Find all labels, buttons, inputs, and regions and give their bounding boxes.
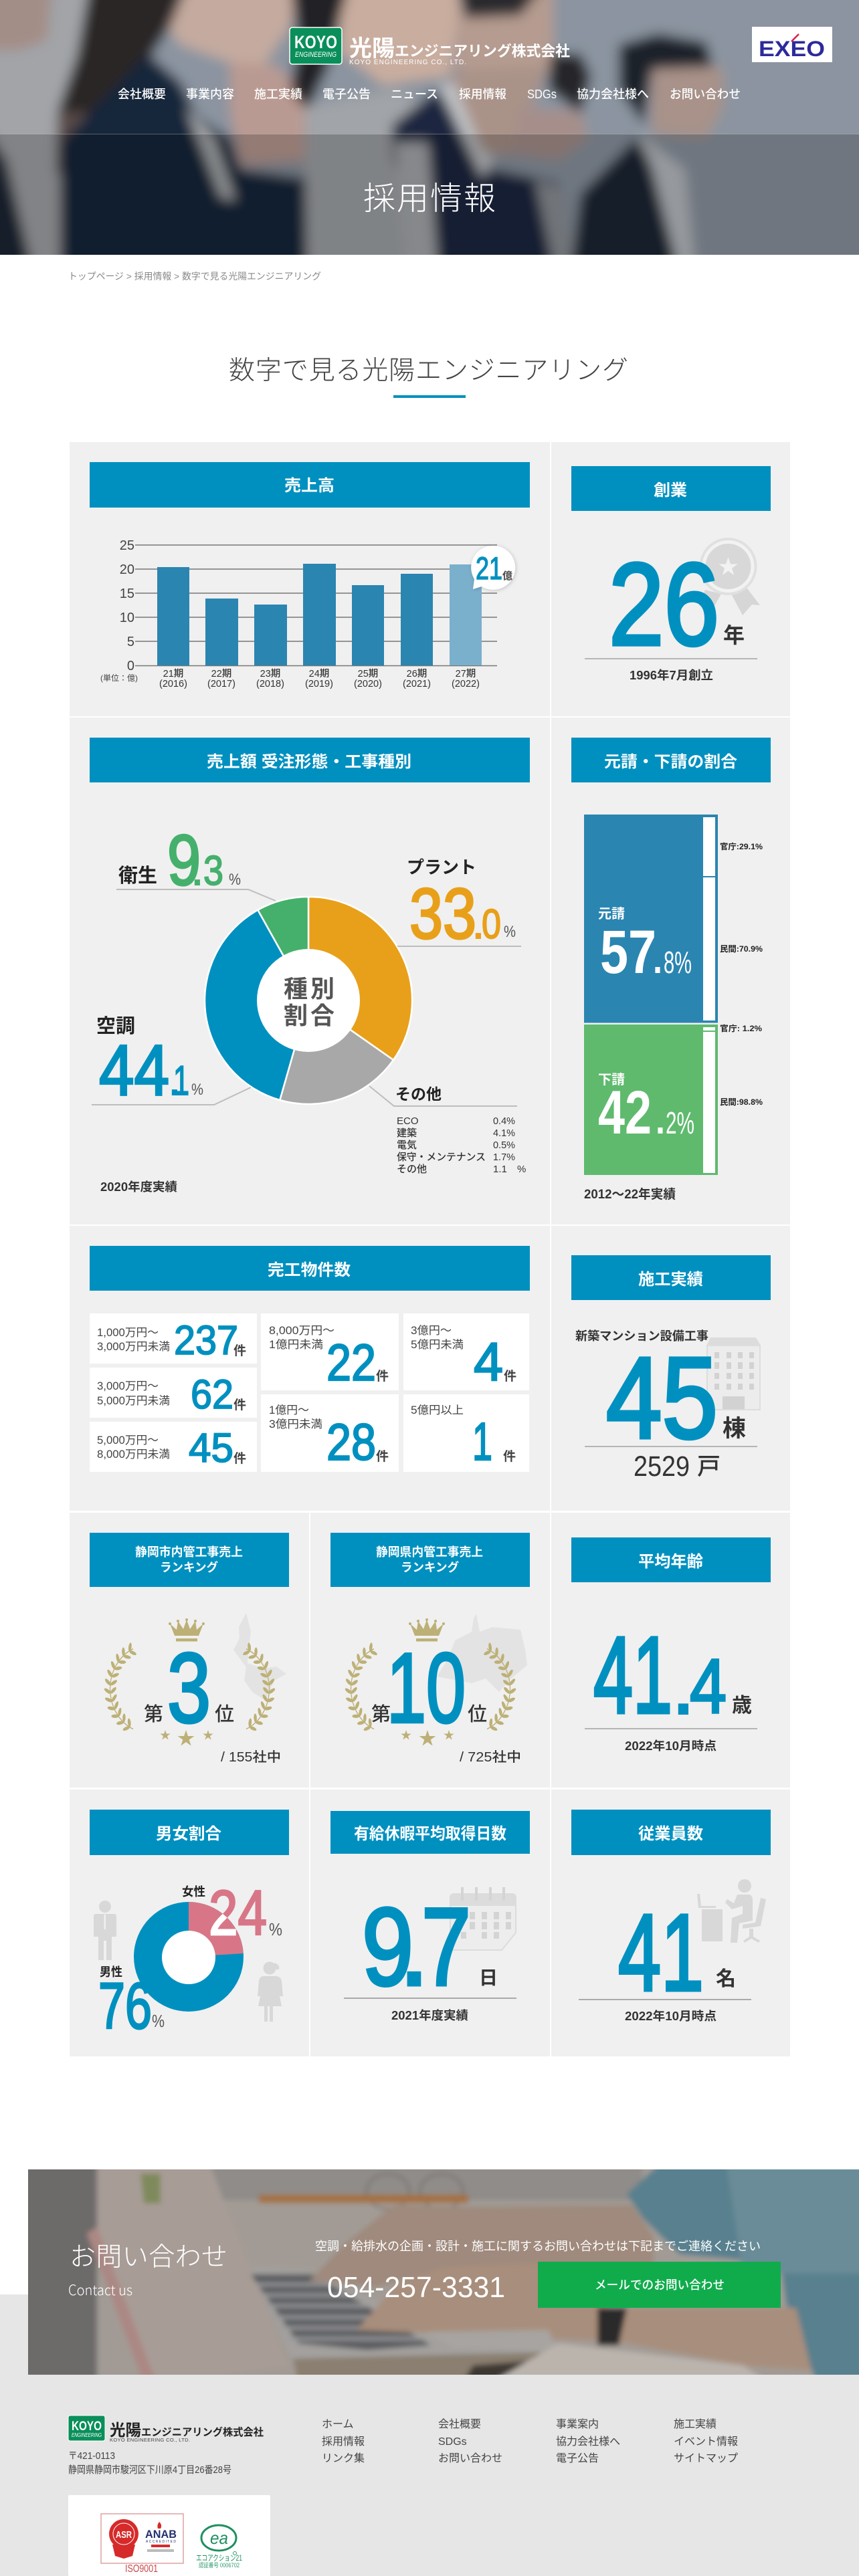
- panel: prefecture ranking: [310, 1513, 550, 1788]
- label: sanitary 9.3%: 3: [203, 848, 223, 894]
- label: air conditioning 44.1%: 空調: [96, 1015, 135, 1037]
- cell: 80M-100M: [261, 1313, 399, 1392]
- bar chart: sales: 0: [127, 659, 134, 673]
- cell: over 500M: [403, 1394, 529, 1472]
- label: other breakdown: 保守・メンテナンス: [397, 1152, 486, 1163]
- panel: employees: 2022年10月時点: [625, 2009, 717, 2023]
- footer background: [0, 2294, 859, 2576]
- badge: ANAB: [145, 2522, 177, 2552]
- panel: construction record: 新築マンション設備工事: [575, 1329, 708, 1343]
- navigation: 協力会社様へ: [577, 88, 649, 101]
- footer links: リンク集: [322, 2452, 365, 2464]
- bar chart: sales: 25: [120, 538, 134, 553]
- callout: 21 oku: 21: [476, 550, 502, 586]
- label: sanitary 9.3%: 衛生: [118, 865, 157, 887]
- value 9.7: 9: [362, 1885, 413, 2008]
- panel: average age: 歳: [732, 1695, 752, 1717]
- panel: average age: 平均年齢: [638, 1553, 703, 1571]
- bar chart: sales: [100, 538, 497, 689]
- panel: construction record: 棟: [723, 1416, 746, 1442]
- rank value: [144, 1633, 234, 1743]
- donut centre label: 割合: [284, 1002, 335, 1029]
- label: air conditioning 44.1%: 1: [173, 1058, 189, 1104]
- panel: paid leave: 2021年度実績: [391, 2008, 468, 2022]
- panel: sales: [70, 442, 550, 716]
- label: female 24%: 24: [209, 1878, 267, 1949]
- navigation: 会社概要: [118, 88, 166, 101]
- rank value: 位: [468, 1703, 487, 1725]
- header logo: ENGINEERING: [295, 51, 337, 59]
- badge: Eco Action 21: ea: [210, 2528, 228, 2548]
- value 9.7: .: [399, 1885, 430, 2008]
- stacked block: subcontract: 2%: [666, 1105, 694, 1140]
- label: air conditioning 44.1%: .: [169, 1056, 181, 1104]
- cell: 30-50M: 3,000万円〜: [97, 1380, 159, 1392]
- contact banner photo: [20, 2160, 859, 2384]
- mail button: [538, 2262, 781, 2308]
- footer links: サイトマップ: [674, 2452, 738, 2464]
- footer logo: ENGINEERING: [72, 2432, 102, 2438]
- panel: employees: 従業員数: [638, 1825, 703, 1843]
- note: fiscal year: 2020年度実績: [100, 1180, 177, 1194]
- label: male 76%: 76: [98, 1969, 152, 2042]
- footer links: SDGs: [438, 2436, 467, 2448]
- footer links: 会社概要: [438, 2418, 481, 2430]
- certification badges: [68, 2495, 270, 2576]
- phone number: 054-257-3331: [327, 2271, 505, 2304]
- panel: employees: [551, 1790, 790, 2056]
- label: other breakdown: その他: [397, 1164, 427, 1175]
- label: air conditioning 44.1%: %: [191, 1081, 203, 1099]
- icon: crown: [409, 1618, 445, 1641]
- cell: 30-50M: [90, 1368, 257, 1418]
- stacked block: prime: 8%: [664, 945, 692, 980]
- stacked block: subcontract: .: [656, 1097, 665, 1142]
- bar chart: sales: 23期: [260, 668, 280, 679]
- cell: 50-80M: [90, 1422, 257, 1472]
- cell: 80M-100M: 22: [326, 1334, 376, 1392]
- bar chart: sales: (2019): [305, 679, 333, 689]
- label: plant 33.0%: プラント: [407, 857, 476, 877]
- badge: Eco Action 21: [196, 2525, 242, 2569]
- bar chart: sales: (単位：億): [100, 673, 138, 683]
- rank value: 第: [144, 1703, 163, 1725]
- rank value: 3: [167, 1633, 211, 1743]
- header logo: 光陽: [349, 36, 395, 62]
- panel: prefecture ranking: 静岡県内管工事売上: [376, 1545, 483, 1559]
- panel: average age: [551, 1513, 790, 1788]
- bar chart: sales: 10: [120, 611, 134, 625]
- badge: ASR: ASR: [116, 2529, 132, 2541]
- label: sanitary 9.3%: .: [191, 846, 203, 894]
- label: other breakdown: 1.7%: [493, 1152, 515, 1163]
- panel: sales by type: 売上額 受注形態・工事種別: [207, 753, 411, 771]
- panel: gender ratio: [70, 1790, 309, 2056]
- panel: city ranking: ランキング: [160, 1560, 218, 1574]
- navigation: ニュース: [391, 88, 438, 101]
- label: other breakdown: その他: [395, 1085, 442, 1103]
- panel: completed projects: 完工物件数: [268, 1261, 351, 1279]
- stacked block: prime: 57: [600, 918, 656, 986]
- panel: construction record: [551, 1226, 790, 1511]
- stacked block: prime: [584, 815, 718, 1023]
- panel: average age: .: [672, 1642, 694, 1731]
- footer links: イベント情報: [674, 2436, 738, 2448]
- panel: sales by type: [70, 718, 550, 1224]
- icon: laurel left: [103, 1641, 138, 1734]
- bar chart: sales: 5: [127, 635, 134, 649]
- panel: construction record: 戸: [697, 1454, 721, 1480]
- stacked block: subcontract: [584, 1025, 718, 1175]
- callout: 21 oku: 億: [502, 570, 512, 582]
- cell: 30-50M: 件: [233, 1398, 246, 1412]
- icon: laurel right: [242, 1641, 276, 1734]
- label: female 24%: [182, 1885, 282, 1935]
- icon: woman: [258, 1962, 283, 2022]
- label: plant 33.0%: [397, 857, 521, 954]
- footer logo: [68, 2416, 264, 2443]
- footer address: 静岡県静岡市駿河区下川原4丁目26番28号: [68, 2464, 231, 2476]
- cell: 10-30M: 件: [233, 1344, 246, 1358]
- panel: founding: 創業: [654, 481, 687, 500]
- bar chart: sales: (2018): [256, 679, 284, 689]
- contact heading: Contact us: [68, 2280, 132, 2300]
- donut chart: [205, 897, 412, 1104]
- bar chart: sales: 21期: [163, 668, 183, 679]
- badge: Eco Action 21: エコアクション21: [196, 2553, 242, 2563]
- label: plant 33.0%: 33: [409, 873, 476, 954]
- cell: 50-80M: 45: [189, 1425, 233, 1471]
- panel: gender ratio: 男女割合: [156, 1825, 221, 1843]
- certification badges: ISO9001: [125, 2563, 158, 2575]
- icon: man: [94, 1901, 116, 1960]
- footer links: 協力会社様へ: [556, 2436, 620, 2448]
- bar chart: sales: 20: [120, 562, 134, 577]
- icon: city map: [233, 1613, 286, 1701]
- panel: founding: [551, 442, 790, 716]
- rank value: 10: [387, 1633, 466, 1743]
- footer links: お問い合わせ: [438, 2452, 502, 2464]
- callout: 21 oku: [471, 546, 515, 590]
- label: male 76%: 男性: [100, 1965, 122, 1979]
- panel: paid leave: [310, 1790, 550, 2056]
- panel: average age: 41: [593, 1614, 672, 1736]
- navigation: 施工実績: [254, 88, 302, 101]
- side labels: 民間:70.9%: [720, 944, 763, 954]
- label: other breakdown: 建築: [397, 1127, 417, 1139]
- cell: 100M-300M: 件: [376, 1449, 389, 1464]
- footer links: 電子公告: [556, 2452, 599, 2464]
- header logo: [290, 27, 570, 66]
- footer links: 採用情報: [322, 2436, 365, 2448]
- footer logo: エンジニアリング株式会社: [141, 2426, 264, 2438]
- label: sanitary 9.3%: [116, 820, 276, 901]
- side labels: 官庁:29.1%: [720, 841, 763, 851]
- header logo: KOYO ENGINEERING CO., LTD.: [349, 59, 466, 66]
- bar chart: sales: 24期: [309, 668, 329, 679]
- footer links: 施工実績: [674, 2418, 717, 2430]
- panel: employees: 41: [618, 1891, 704, 2014]
- cell: 300M-500M: 件: [504, 1369, 516, 1384]
- footer logo: 光陽: [110, 2422, 141, 2440]
- cell: 100M-300M: [261, 1394, 399, 1472]
- panel: prime vs subcontract: 元請・下請の割合: [604, 753, 737, 771]
- footer links: 事業案内: [556, 2418, 599, 2430]
- cell: 300M-500M: 4: [474, 1332, 503, 1392]
- cell: 80M-100M: 8,000万円〜: [269, 1325, 335, 1337]
- panel: city ranking: 静岡市内管工事売上: [135, 1545, 243, 1559]
- navigation: 電子公告: [322, 88, 371, 101]
- icon: building: [706, 1337, 761, 1410]
- side labels: [720, 841, 763, 1107]
- cell: 10-30M: 1,000万円〜: [97, 1327, 159, 1339]
- navigation: お問い合わせ: [670, 88, 741, 101]
- footer links: [322, 2418, 738, 2464]
- panel: founding: 26: [609, 540, 719, 670]
- label: other breakdown: 電気: [397, 1140, 417, 1151]
- bar chart: sales: (2017): [207, 679, 235, 689]
- stacked block: prime: .: [653, 937, 662, 982]
- title underline: [393, 395, 466, 398]
- panel: paid leave: 有給休暇平均取得日数: [354, 1825, 506, 1843]
- bar chart: sales: (2022): [452, 679, 480, 689]
- label: sanitary 9.3%: %: [229, 871, 241, 889]
- icon: stars: [401, 1730, 454, 1746]
- navigation: [118, 88, 741, 101]
- value 9.7: [362, 1885, 471, 2008]
- cell: 80M-100M: 件: [376, 1369, 389, 1384]
- rank value: 位: [215, 1703, 234, 1725]
- cell: 10-30M: [90, 1313, 257, 1364]
- value 9.7: 7: [421, 1885, 471, 2008]
- contact message: 空調・給排水の企画・設計・施工に関するお問い合わせは下記までご連絡ください: [315, 2240, 761, 2253]
- bar chart: sales: (2021): [403, 679, 431, 689]
- EXEO logo: EXEO: [759, 37, 825, 61]
- EXEO logo: [752, 27, 832, 62]
- bar chart: sales: 26期: [407, 668, 427, 679]
- panel: prime vs subcontract: [551, 718, 790, 1224]
- label: male 76%: %: [152, 2011, 165, 2031]
- label: plant 33.0%: 0: [482, 901, 501, 948]
- footer logo: KOYO: [72, 2420, 102, 2434]
- icon: calendar: [450, 1887, 516, 1950]
- panel: paid leave: 日: [479, 1967, 498, 1988]
- label: air conditioning 44.1%: 44: [99, 1030, 169, 1110]
- cell: 80M-100M: 1億円未満: [269, 1338, 323, 1351]
- cell: over 500M: 5億円以上: [411, 1404, 464, 1416]
- panel: completed projects: [70, 1226, 550, 1511]
- panel: prefecture ranking: ランキング: [401, 1560, 459, 1574]
- section title: 数字で見る光陽エンジニアリング: [229, 356, 628, 385]
- cell: 100M-300M: 3億円未満: [269, 1418, 322, 1430]
- bar chart: sales: 22期: [211, 668, 231, 679]
- footer logo: KOYO ENGINEERING CO., LTD.: [110, 2437, 190, 2443]
- cell: 30-50M: 5,000万円未満: [97, 1394, 170, 1407]
- badge: ASR: [109, 2519, 138, 2559]
- bar chart: sales: 15: [120, 586, 134, 601]
- hero title: 採用情報: [363, 181, 496, 217]
- icon: laurel left: [344, 1641, 379, 1734]
- cell: over 500M: 1: [472, 1412, 492, 1471]
- label: female 24%: 24: [209, 1878, 267, 1949]
- header logo: エンジニアリング株式会社: [395, 43, 570, 60]
- navigation: 事業内容: [186, 88, 234, 101]
- panel: construction record: 施工実績: [638, 1271, 703, 1289]
- icon: person at desk: [697, 1879, 766, 1943]
- icon: medal: [699, 539, 760, 615]
- panel: construction record: 2529: [634, 1451, 690, 1483]
- navigation: SDGs: [527, 88, 557, 101]
- bar chart: sales: 27期: [456, 668, 476, 679]
- cell: 50-80M: 8,000万円未満: [97, 1448, 170, 1461]
- label: other breakdown: %: [517, 1164, 526, 1175]
- header logo: KOYO: [294, 32, 337, 52]
- cell: 30-50M: 62: [191, 1372, 233, 1417]
- footer links: ホーム: [322, 2419, 354, 2430]
- label: other breakdown: ECO: [397, 1115, 419, 1127]
- donut centre label: 種別: [284, 975, 335, 1002]
- badge: ANAB: ACCREDITED: [146, 2540, 176, 2544]
- bar chart: sales: (2020): [354, 679, 382, 689]
- panel: construction record: 45: [606, 1333, 718, 1463]
- contact heading: [68, 2243, 227, 2300]
- panel: founding: 1996年7月創立: [630, 668, 713, 682]
- cell: 50-80M: 件: [233, 1451, 246, 1466]
- mail button: メールでのお問い合わせ: [595, 2278, 725, 2292]
- panel: sales: 売上高: [284, 477, 335, 495]
- cell: 300M-500M: 5億円未満: [411, 1338, 464, 1351]
- cell: 10-30M: 3,000万円未満: [97, 1340, 170, 1353]
- panel: city ranking: / 155社中: [221, 1749, 281, 1765]
- footer address: 〒421-0113: [68, 2450, 115, 2462]
- label: air conditioning 44.1%: [92, 1015, 251, 1110]
- cell: 100M-300M: 1億円〜: [269, 1404, 309, 1416]
- stacked block: subcontract: 42: [598, 1079, 652, 1147]
- side labels: 民間:98.8%: [720, 1097, 763, 1107]
- panel: average age: 2022年10月時点: [625, 1739, 717, 1753]
- panel: employees: 名: [716, 1968, 736, 1990]
- label: other breakdown: [369, 1085, 526, 1175]
- note: period: 2012〜22年実績: [584, 1186, 676, 1202]
- panel: prefecture ranking: / 725社中: [460, 1749, 521, 1765]
- cell: 100M-300M: 28: [326, 1414, 376, 1471]
- navigation: 採用情報: [459, 88, 506, 101]
- side labels: 官庁: 1.2%: [720, 1023, 762, 1033]
- panel: average age: 4: [690, 1644, 727, 1729]
- panel: founding: 年: [723, 623, 745, 647]
- breadcrumb: トップページ > 採用情報 > 数字で見る光陽エンジニアリング: [68, 271, 321, 282]
- badge: Eco Action 21: 認証番号 0006702: [199, 2561, 240, 2569]
- label: other breakdown: 0.4%: [493, 1115, 515, 1127]
- cell: 50-80M: 5,000万円〜: [97, 1434, 159, 1446]
- cell: 300M-500M: [403, 1313, 529, 1392]
- donut chart: gender: [134, 1902, 244, 2012]
- icon: prefecture map: [437, 1614, 527, 1692]
- label: other breakdown: 4.1%: [493, 1128, 515, 1139]
- cell: 300M-500M: 3億円〜: [411, 1324, 452, 1337]
- bar chart: sales: 25期: [358, 668, 378, 679]
- label: other breakdown: 0.5%: [493, 1140, 515, 1151]
- icon: stars: [160, 1730, 213, 1746]
- panel: city ranking: [70, 1513, 309, 1788]
- cell: over 500M: 件: [503, 1449, 516, 1464]
- footer address: [68, 2450, 231, 2476]
- bar chart: sales: (2016): [159, 679, 187, 689]
- badge: ANAB: ANAB: [145, 2528, 177, 2541]
- icon: crown: [169, 1618, 205, 1641]
- label: plant 33.0%: .: [472, 899, 484, 948]
- label: female 24%: %: [269, 1919, 282, 1939]
- cell: 10-30M: 237: [174, 1317, 238, 1363]
- donut centre label: [284, 975, 335, 1029]
- stacked block: prime: 元請: [598, 906, 625, 922]
- stacked block: subcontract: 下請: [598, 1072, 625, 1087]
- label: plant 33.0%: %: [504, 923, 516, 941]
- rank value: 第: [371, 1703, 391, 1725]
- icon: laurel right: [482, 1641, 517, 1734]
- label: female 24%: 女性: [182, 1885, 205, 1899]
- hero photo background: [0, 0, 859, 274]
- label: sanitary 9.3%: 9: [167, 820, 201, 900]
- contact heading: お問い合わせ: [70, 2243, 227, 2272]
- label: other breakdown: 1.1: [493, 1164, 507, 1175]
